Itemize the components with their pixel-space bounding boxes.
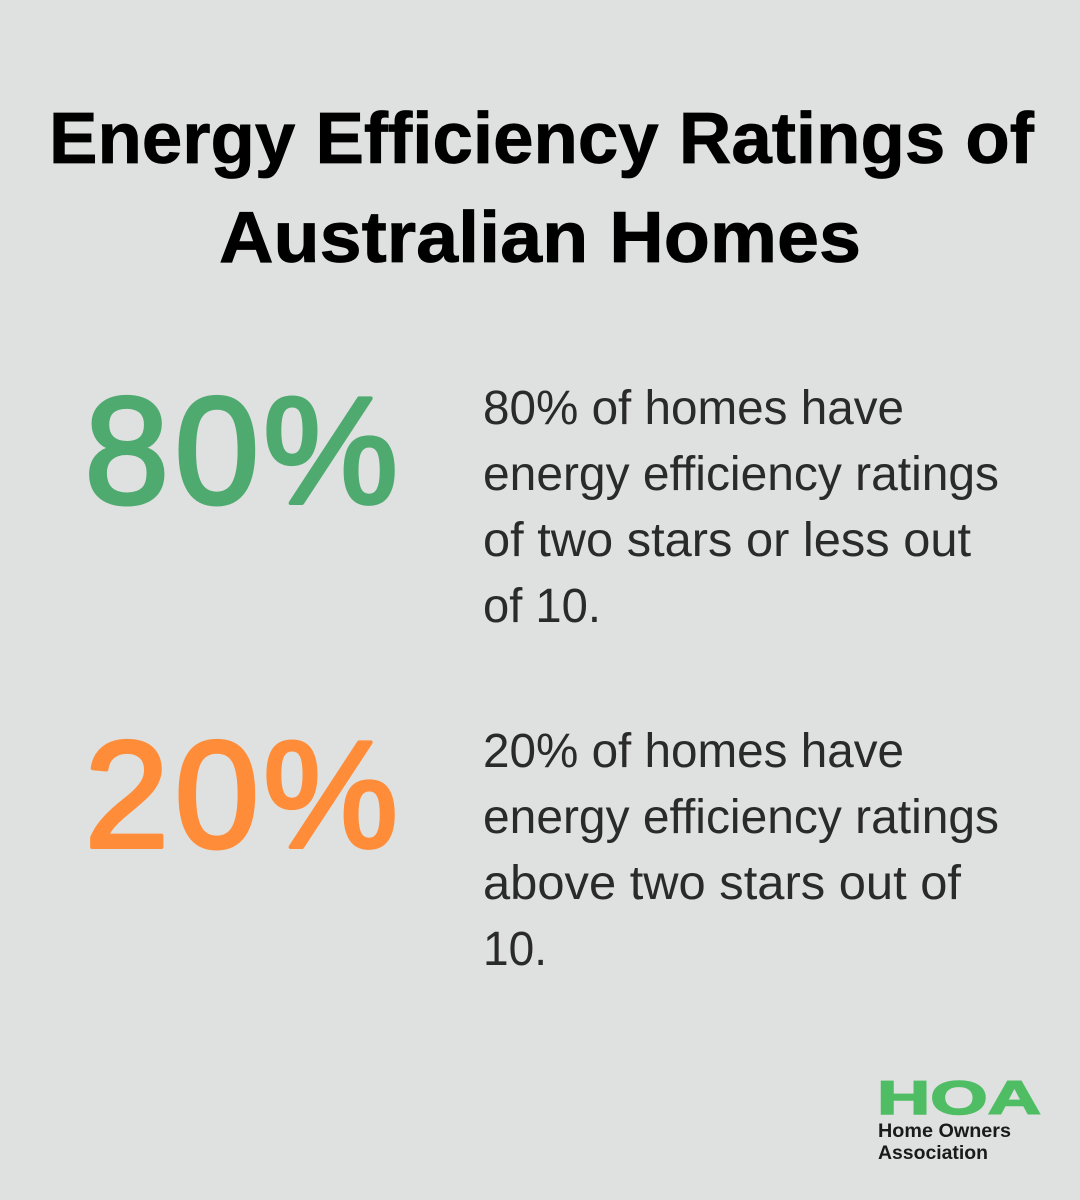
title: Australian Homes xyxy=(219,198,861,278)
panel: 20 percent statistic xyxy=(84,710,999,976)
text block: 80% description: 80% of homes have xyxy=(483,382,904,435)
title xyxy=(49,99,1035,278)
text block: 20% description: energy efficiency ratings xyxy=(483,791,999,844)
text block: 20% description: 20% of homes have xyxy=(483,725,904,778)
big number: 80%: 80% xyxy=(84,366,398,536)
text block: 80% description: of two stars or less out xyxy=(483,514,971,567)
logo wordmark xyxy=(878,1120,1011,1164)
big number: 20%: 20% xyxy=(84,710,398,880)
text block: 20% description: 10. xyxy=(483,923,547,976)
text block: 80% description: of 10. xyxy=(483,580,601,633)
logo mark: HOA: HOA xyxy=(877,1071,1041,1124)
text block: 20% description: above two stars out of xyxy=(483,857,962,910)
panel: 80 percent statistic xyxy=(84,366,999,633)
logo wordmark: Home Owners xyxy=(878,1120,1011,1142)
logo wordmark: Association xyxy=(878,1142,988,1164)
text block: 80% description xyxy=(483,382,999,633)
text block: 80% description: energy efficiency ratings xyxy=(483,448,999,501)
title: Energy Efficiency Ratings of xyxy=(49,99,1035,179)
logo: Home Owners Association xyxy=(877,1071,1041,1164)
text block: 20% description xyxy=(483,725,999,976)
